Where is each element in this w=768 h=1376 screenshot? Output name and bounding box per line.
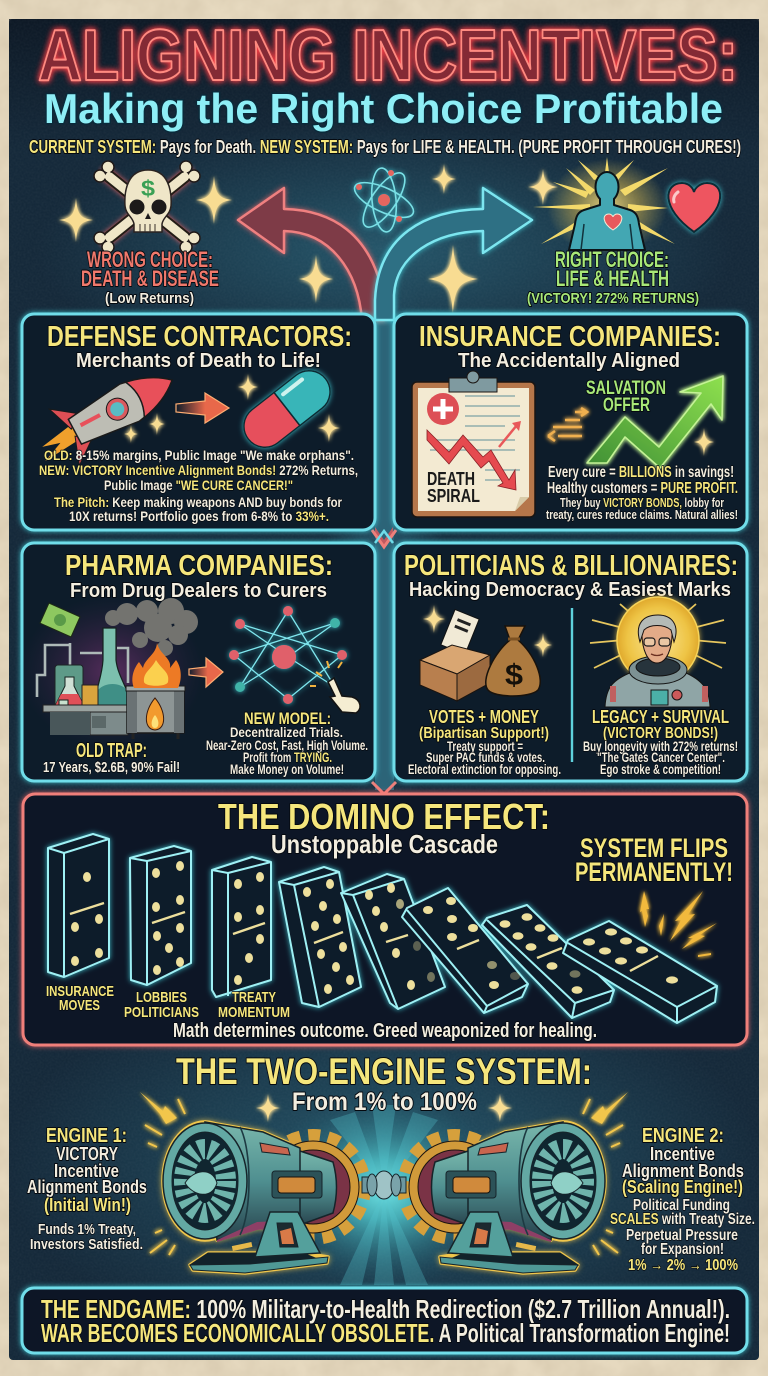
icon: skull and crossbones: [94, 161, 200, 253]
left vessel: [55, 665, 83, 707]
heading: [47, 321, 352, 372]
dominoes: [48, 834, 717, 1023]
body text: Every cure = BILLIONS in savings!: [548, 464, 734, 481]
heading: The Accidentally Aligned: [458, 350, 680, 372]
arrow: [176, 393, 229, 423]
sparkles: [423, 605, 552, 657]
salvation offer label: SALVATION: [586, 378, 666, 399]
arrow: [189, 658, 223, 687]
votes plus money caption: Electoral extinction for opposing.: [408, 762, 561, 777]
label: wrong choice: WRONG CHOICE:: [87, 247, 213, 272]
label: right choice: [527, 247, 699, 307]
panel: politicians and billionaires: [394, 543, 747, 781]
body text: Public Image "WE CURE CANCER!": [104, 477, 293, 493]
icon: heart: [668, 183, 720, 232]
body text: They buy VICTORY BONDS, lobby for: [560, 495, 724, 510]
central burst: [264, 1090, 504, 1290]
gear: [261, 1135, 365, 1239]
engine 1 text: [27, 1125, 147, 1253]
icon: skull and crossbones: $: [141, 176, 155, 201]
icon: old lab with fire: [20, 596, 204, 748]
engine 1 text: ENGINE 1:: [46, 1125, 127, 1147]
engine 2 text: [610, 1125, 755, 1274]
table: [43, 705, 128, 712]
engine 2 text: (Scaling Engine!): [622, 1177, 743, 1197]
heading: DEFENSE CONTRACTORS:: [47, 321, 352, 353]
new model caption: Near-Zero Cost, Fast, High Volume.: [206, 737, 368, 753]
icon: clipboard death spiral: [412, 371, 535, 517]
sparkle: [694, 428, 714, 456]
engine 2 text: Incentive: [650, 1144, 715, 1164]
body text: NEW: VICTORY Incentive Alignment Bonds! 272% Returns,: [39, 462, 358, 478]
icon: money sack: $: [505, 659, 523, 692]
body text: The Pitch: Keep making weapons AND buy bonds for: [54, 494, 342, 510]
panel: domino effect: [23, 794, 747, 1045]
heading: THE TWO-ENGINE SYSTEM:: [176, 1051, 592, 1092]
heading: [218, 796, 550, 859]
engine 1 text: Alignment Bonds: [27, 1177, 147, 1197]
engine 2 text: Perpetual Pressure: [626, 1227, 738, 1244]
old trap caption: OLD TRAP:: [76, 740, 147, 762]
heading: Unstoppable Cascade: [271, 829, 498, 859]
icon: exchange arrows: [548, 408, 587, 441]
panel: insurance companies: [394, 314, 747, 530]
heading: THE DOMINO EFFECT:: [218, 796, 550, 837]
engine 2 text: Political Funding: [633, 1197, 730, 1214]
hub: [297, 1150, 336, 1226]
domino labels: MOMENTUM: [218, 1004, 290, 1021]
body: [205, 1122, 300, 1240]
icon: person with sunburst: [533, 157, 675, 255]
legacy plus survival caption: [583, 707, 738, 777]
engine 2 text: for Expansion!: [641, 1241, 724, 1258]
votes plus money caption: (Bipartisan Support!): [419, 725, 549, 742]
fire: [132, 643, 181, 688]
legacy plus survival caption: Ego stroke & competition!: [600, 762, 721, 777]
fan disc: [163, 1123, 247, 1239]
heading: From 1% to 100%: [292, 1088, 477, 1116]
label: right choice: RIGHT CHOICE:: [555, 247, 669, 272]
label: wrong choice: [81, 247, 219, 307]
icon: engine 2: [403, 1122, 605, 1273]
icon: rocket: [25, 352, 187, 479]
icon: coupling: [362, 1171, 406, 1199]
caption: Math determines outcome. Greed weaponized for healing.: [173, 1020, 597, 1042]
domino labels: MOVES: [59, 997, 100, 1014]
domino labels: LOBBIES: [136, 989, 187, 1006]
arrow: wrong choice (red): [238, 188, 384, 320]
label: wrong choice: (Low Returns): [105, 290, 194, 307]
old trap caption: [43, 740, 180, 776]
old trap caption: 17 Years, $2.6B, 90% Fail!: [43, 759, 180, 776]
divider: [571, 608, 573, 762]
new model caption: Decentralized Trials.: [230, 724, 343, 740]
arrow: right choice (blue): [375, 188, 532, 320]
panel: defense contractors: [22, 314, 375, 530]
heading: [176, 1051, 592, 1116]
icon: capsule: [235, 362, 339, 456]
money: [40, 603, 80, 637]
heading: [419, 321, 721, 372]
new model caption: NEW MODEL:: [244, 709, 331, 728]
panel: pharma companies: [20, 543, 375, 781]
engine 1 text: Funds 1% Treaty,: [38, 1221, 136, 1238]
yellow glow outline: [163, 1122, 328, 1273]
icon: green rising arrow: [587, 376, 723, 468]
sparkles top: [59, 164, 558, 313]
network diagram: [229, 606, 347, 704]
icon: billionaire astronaut portrait: [590, 597, 726, 707]
salvation offer label: [586, 378, 666, 416]
flasks: [95, 628, 130, 705]
panel: the endgame: [22, 1288, 747, 1353]
body text: 10X returns! Portfolio goes from 6-8% to 33%+.: [69, 508, 329, 524]
domino labels: INSURANCE: [46, 983, 114, 1000]
heading: [65, 550, 333, 602]
icon: clipboard death spiral: SPIRAL: [427, 486, 480, 506]
shaft: [272, 1171, 322, 1198]
heading: Hacking Democracy & Easiest Marks: [409, 579, 731, 601]
stand: [190, 1253, 320, 1265]
heading: PHARMA COMPANIES:: [65, 550, 333, 582]
engine 1 text: Investors Satisfied.: [30, 1236, 143, 1253]
sparkles: [124, 374, 340, 443]
engine 2 text: ENGINE 2:: [642, 1125, 724, 1147]
engine 2 text: 1% → 2% → 100%: [628, 1257, 738, 1274]
body text: [546, 464, 738, 522]
sparkles: [256, 1094, 512, 1122]
label: right choice: LIFE & HEALTH: [556, 266, 669, 291]
heading: [404, 550, 738, 601]
new model caption: [206, 709, 368, 777]
central stem and crossing: [372, 300, 396, 794]
votes plus money caption: VOTES + MONEY: [429, 707, 539, 727]
icon: pointing hand: [310, 661, 360, 713]
section: two-engine system: [27, 1051, 755, 1290]
new model caption: Make Money on Volume!: [230, 761, 344, 777]
icon: ballot box: [420, 610, 490, 701]
engine 2 text: Alignment Bonds: [622, 1161, 744, 1181]
body text: [39, 447, 358, 524]
votes plus money caption: Treaty support =: [447, 739, 523, 754]
legacy plus survival caption: (VICTORY BONDS!): [603, 725, 718, 742]
smoke: [105, 598, 198, 656]
domino labels: POLITICIANS: [124, 1004, 199, 1021]
engine 1 text: VICTORY: [56, 1144, 118, 1164]
engine 1 text: (Initial Win!): [44, 1195, 131, 1215]
new model caption: Profit from TRYING.: [243, 749, 332, 765]
heading: Merchants of Death to Life!: [76, 350, 321, 372]
subtitle: Making the Right Choice Profitable: [44, 85, 723, 132]
lightning bolts: [640, 891, 717, 957]
icon: atom: [350, 167, 418, 233]
icon: money sack: [486, 626, 540, 696]
icon: clipboard death spiral: DEATH: [427, 469, 475, 489]
callout: system flips: [575, 833, 733, 887]
body text: OLD: 8-15% margins, Public Image "We make orphans".: [44, 447, 354, 463]
votes plus money caption: Super PAC funds & votes.: [426, 750, 545, 765]
body text: Healthy customers = PURE PROFIT.: [547, 480, 738, 497]
domino labels: TREATY: [232, 989, 276, 1006]
votes plus money caption: [408, 707, 561, 777]
label: wrong choice: DEATH & DISEASE: [81, 266, 219, 291]
icon: engine 1: [163, 1122, 365, 1273]
barrel: [127, 689, 184, 733]
salvation offer label: OFFER: [603, 395, 650, 416]
heading: From Drug Dealers to Curers: [70, 580, 327, 602]
pipes: [37, 643, 128, 697]
label: right choice: (VICTORY! 272% RETURNS): [527, 290, 699, 307]
lightning bolts and ticks: [140, 1092, 628, 1255]
domino labels: [46, 983, 290, 1021]
engine 1 text: Incentive: [54, 1161, 119, 1181]
